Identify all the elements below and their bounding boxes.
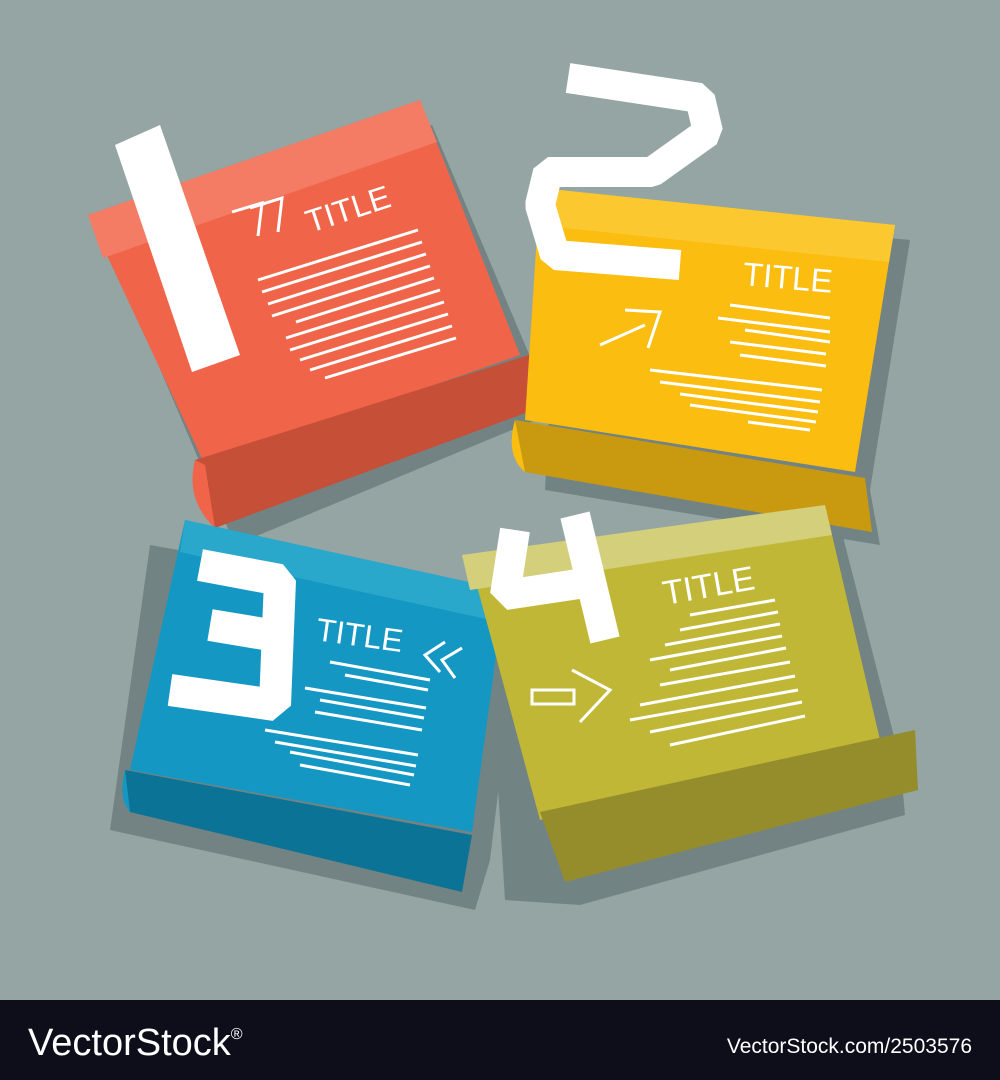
number 2 — [540, 78, 708, 265]
text lines 1 — [258, 230, 456, 378]
title 3: TITLE — [314, 611, 405, 659]
number 4 — [505, 515, 605, 640]
shadows — [105, 125, 910, 910]
icon: arrow 4 — [532, 670, 610, 722]
title 1: TITLE — [301, 178, 395, 240]
text lines 4 — [630, 600, 805, 745]
panel: step 3 blue — [122, 520, 505, 892]
icon: arrows — [232, 198, 282, 236]
footer bar: VectorStock — [28, 1022, 231, 1064]
panel: step 4 olive — [462, 505, 918, 882]
footer bar: VectorStock.com/2503576 — [727, 1035, 972, 1058]
icon: arrow 2 — [600, 310, 660, 348]
footer bar — [0, 1000, 1000, 1080]
number 1 — [115, 125, 240, 372]
icon: arrows 3 — [425, 642, 462, 678]
text lines 3 — [265, 662, 430, 785]
title 4: TITLE — [660, 559, 758, 613]
number 3 — [170, 565, 280, 705]
panel: step 2 yellow — [512, 78, 895, 532]
title 2: TITLE — [741, 255, 834, 300]
text lines 2 — [650, 305, 830, 430]
footer bar: ® — [231, 1026, 243, 1043]
panel: step 1 red — [88, 100, 555, 528]
